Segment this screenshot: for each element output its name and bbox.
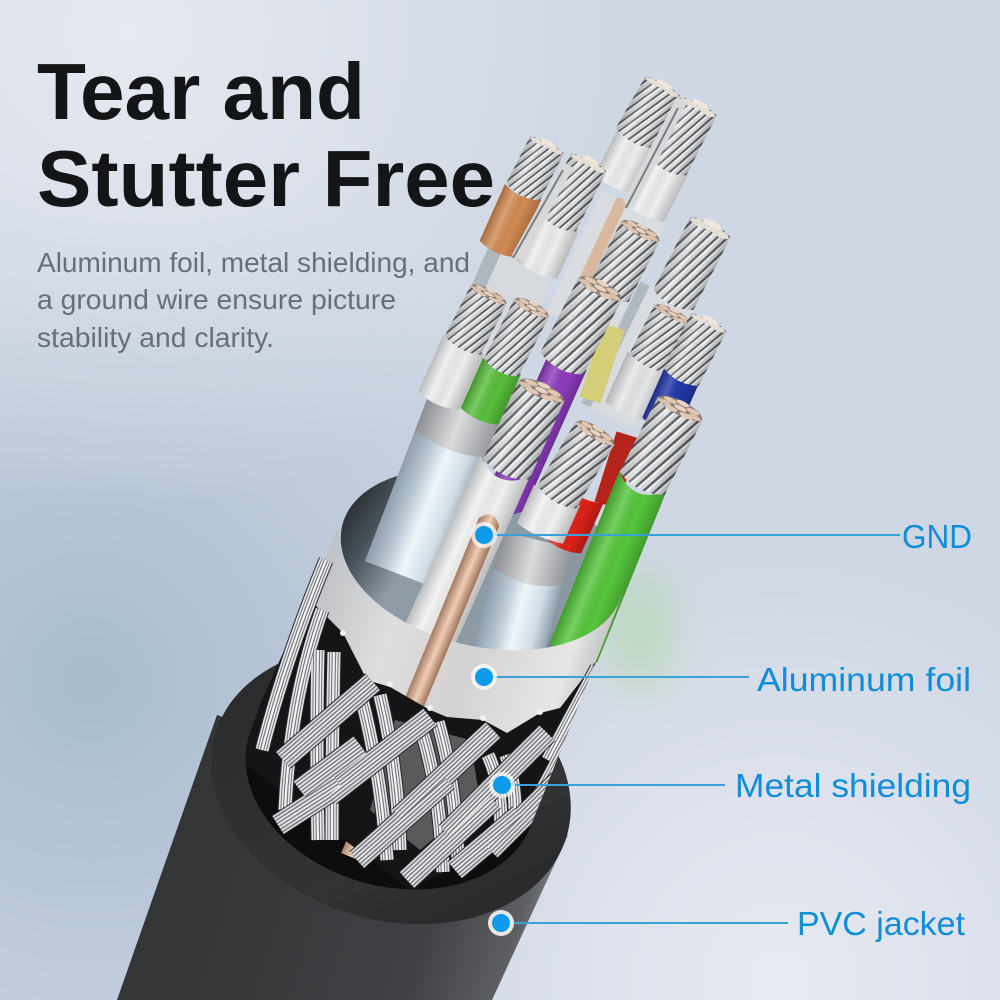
purple wire <box>482 270 625 521</box>
wire bundles <box>365 72 734 674</box>
foil interior back <box>321 441 643 679</box>
aluminum foil <box>316 524 622 757</box>
callout: PVC jacket: PVC jacket <box>797 905 965 942</box>
description text: stability and clarity. <box>37 322 274 353</box>
title: Stutter Free <box>37 134 495 223</box>
sheaths behind upper pairs <box>440 190 696 430</box>
yellow wire <box>590 327 614 400</box>
white and green pair <box>416 280 552 428</box>
title <box>37 47 495 223</box>
description text: Aluminum foil, metal shielding, and <box>37 247 470 278</box>
white and blue pair <box>604 300 729 436</box>
metal shielding braid <box>240 557 597 890</box>
orange and white pair <box>478 132 609 282</box>
second sheath <box>473 532 571 670</box>
ground wire <box>340 511 502 861</box>
callout: Aluminum foil <box>471 661 971 698</box>
red wire <box>543 435 628 557</box>
PVC jacket <box>117 605 604 1000</box>
description text <box>37 247 470 353</box>
callout: Metal shielding: Metal shielding <box>735 767 971 804</box>
callout: GND: GND <box>902 518 972 555</box>
callout: PVC jacket <box>488 905 965 942</box>
white wire with copper tip <box>398 373 568 663</box>
title: Tear and <box>37 47 365 136</box>
short white wire <box>516 415 618 546</box>
copper tip wires back <box>588 211 734 315</box>
callout: GND <box>471 518 972 555</box>
green wire <box>545 390 706 674</box>
callout: Aluminum foil: Aluminum foil <box>757 661 971 698</box>
description text: a ground wire ensure picture <box>37 284 396 315</box>
big sheath <box>365 374 507 588</box>
callout: Metal shielding <box>489 767 971 804</box>
green glow beside cable <box>608 568 672 692</box>
top pair: white wires <box>593 72 719 225</box>
